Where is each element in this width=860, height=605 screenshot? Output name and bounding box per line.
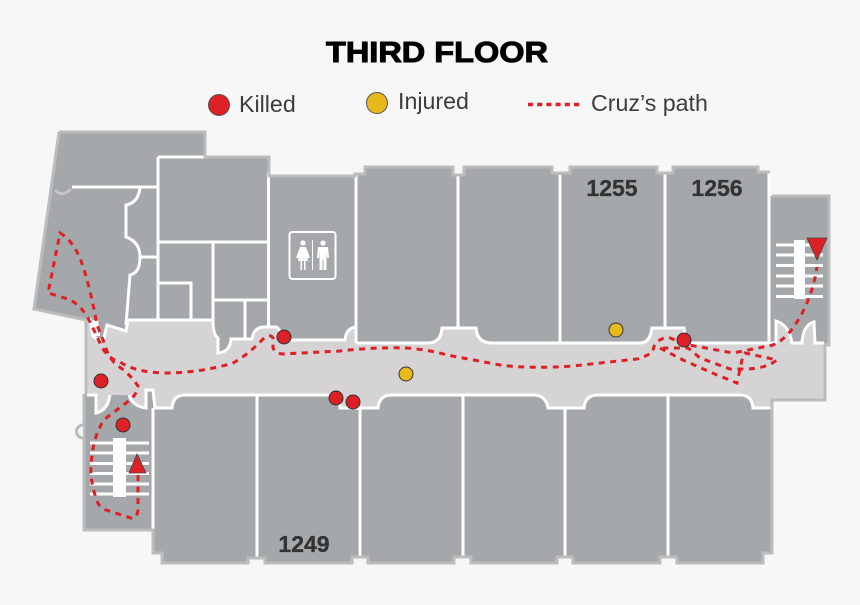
marker: start triangle xyxy=(129,454,146,473)
legend: killed xyxy=(208,91,296,117)
interior walls xyxy=(55,157,824,558)
door wedge, west wing xyxy=(92,320,100,336)
killed markers xyxy=(94,330,691,432)
room number 1256: 1256 xyxy=(691,175,743,201)
injured markers xyxy=(399,323,623,381)
legend: path: Cruz’s path xyxy=(591,90,708,116)
legend: injured: Injured xyxy=(398,88,469,114)
corridor xyxy=(86,320,825,413)
floor plan xyxy=(34,132,829,563)
marker: end triangle xyxy=(807,238,827,260)
legend: injured xyxy=(366,88,469,114)
title: THIRD FLOOR xyxy=(326,37,548,69)
outer wall outline xyxy=(34,132,829,563)
room number 1255: 1255 xyxy=(586,175,638,201)
icon: restrooms xyxy=(290,232,336,279)
room number 1249: 1249 xyxy=(278,531,330,557)
left stairs xyxy=(90,438,149,497)
left stair bump xyxy=(76,425,83,438)
building footprint xyxy=(34,132,829,563)
legend xyxy=(208,88,708,117)
legend: killed: Killed xyxy=(239,91,296,117)
gunman path xyxy=(48,233,817,518)
right stairs xyxy=(776,240,823,299)
